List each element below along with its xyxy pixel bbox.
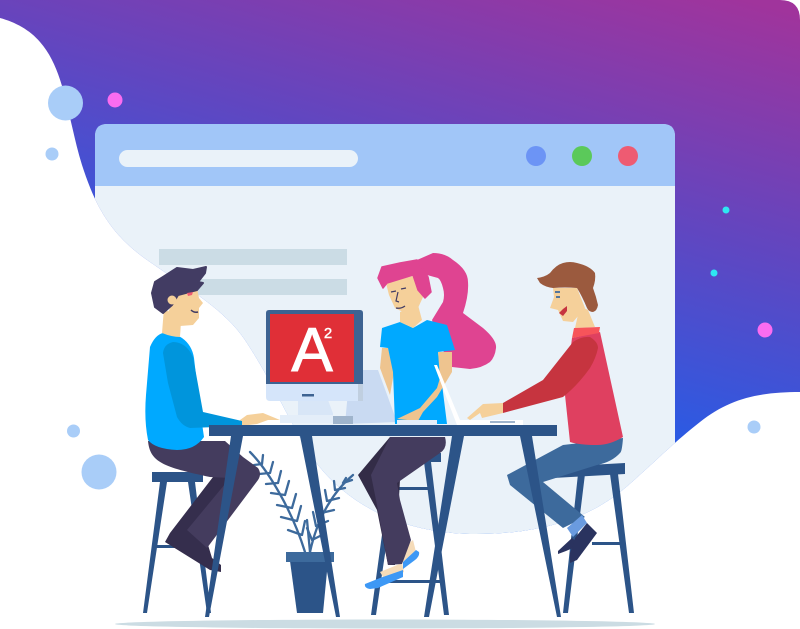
plant xyxy=(250,452,353,613)
ground shadow xyxy=(115,620,655,628)
monitor frame xyxy=(266,310,363,386)
hair xyxy=(152,267,206,313)
mouth xyxy=(559,306,567,316)
torso xyxy=(145,333,204,450)
feet skin xyxy=(380,540,416,580)
table legs xyxy=(205,436,561,617)
neck xyxy=(400,305,422,328)
laptop back left xyxy=(345,370,397,424)
shoes xyxy=(365,550,419,589)
front shoe xyxy=(570,523,597,563)
logo A: A xyxy=(291,316,333,385)
ear xyxy=(168,296,176,304)
content line one xyxy=(159,249,347,265)
decorative dots xyxy=(46,86,772,490)
torso xyxy=(565,332,623,445)
plant pot xyxy=(290,561,328,613)
neck xyxy=(575,306,595,328)
collar xyxy=(572,327,600,338)
eyebrow mark xyxy=(187,292,193,296)
table top xyxy=(209,425,557,436)
trousers xyxy=(507,438,623,528)
laptop left base xyxy=(397,420,437,425)
back shoe xyxy=(558,538,580,554)
stool xyxy=(371,453,449,615)
monitor chin xyxy=(266,384,363,401)
table xyxy=(205,425,561,617)
monitor xyxy=(266,310,363,424)
address bar xyxy=(119,150,358,167)
facial features xyxy=(391,288,406,308)
monitor screen xyxy=(270,314,354,382)
smile xyxy=(191,310,198,312)
person: left man xyxy=(143,267,280,613)
person: woman xyxy=(358,253,496,615)
face xyxy=(168,288,203,326)
torso xyxy=(380,320,455,424)
face xyxy=(386,276,423,312)
front leg xyxy=(148,441,260,548)
window button red xyxy=(618,146,638,166)
content line two xyxy=(198,279,347,295)
hair front xyxy=(378,260,431,298)
back arm xyxy=(380,348,394,395)
laptop right xyxy=(434,365,523,425)
hand xyxy=(467,403,503,420)
back leg xyxy=(165,477,232,572)
stool xyxy=(143,472,211,613)
arm xyxy=(163,342,242,428)
hand xyxy=(240,413,280,426)
ponytail xyxy=(417,253,496,369)
front arm xyxy=(397,352,452,421)
eye xyxy=(555,292,560,297)
back leg xyxy=(358,437,410,565)
front leg xyxy=(371,437,446,565)
hair xyxy=(537,262,598,312)
monitor stand xyxy=(298,400,333,415)
browser window xyxy=(95,124,675,574)
cuff xyxy=(567,515,587,537)
person: right man xyxy=(467,262,634,613)
window button blue xyxy=(526,146,546,166)
arm xyxy=(503,337,598,413)
stool xyxy=(553,463,634,613)
browser title bar xyxy=(95,124,675,186)
window button green xyxy=(572,146,592,166)
neck xyxy=(162,308,181,337)
logo exponent: 2 xyxy=(324,325,332,342)
face xyxy=(550,288,585,322)
